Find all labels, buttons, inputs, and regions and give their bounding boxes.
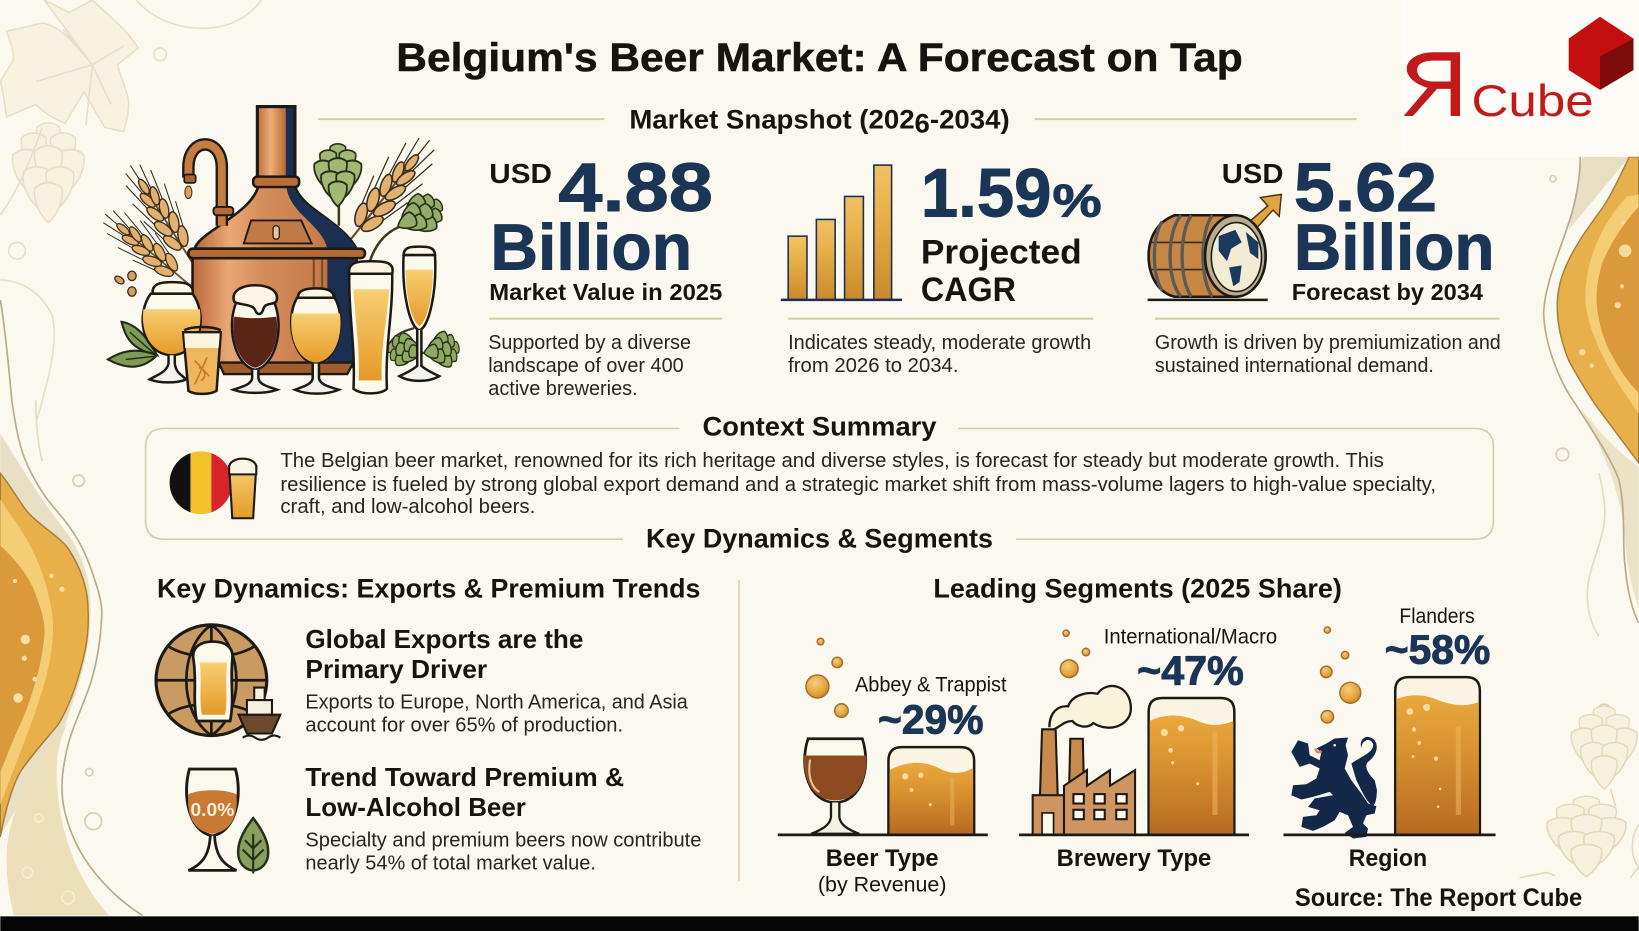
black footer bar	[0, 916, 1639, 931]
icon: Flemish lion	[1291, 737, 1377, 839]
kettle	[184, 107, 365, 374]
panel: leading segments	[778, 573, 1496, 896]
stat card: market value: USD	[489, 157, 552, 189]
icon: barrel with globe and arrow	[1148, 194, 1281, 300]
panel: leading segments: Leading Segments (2025 Share)	[933, 573, 1342, 604]
bar: 29 percent	[888, 747, 974, 834]
segment: beer type: ~29%	[878, 697, 984, 743]
stat card: CAGR: Indicates steady, moderate growth	[788, 332, 1091, 354]
segment: beer type: (by Revenue)	[818, 873, 946, 896]
wheat and hops behind kettle	[94, 127, 451, 316]
heading: market snapshot: Market Snapshot (202	[629, 104, 910, 135]
panel: key dynamics: Global Exports are the	[305, 624, 583, 654]
stat card: forecast: Forecast by 2034	[1292, 279, 1483, 305]
panel: key dynamics: Trend Toward Premium &	[305, 762, 624, 792]
beer wave left	[0, 300, 142, 915]
leaves at base left	[108, 322, 157, 367]
stat card: forecast: sustained international demand.	[1155, 355, 1434, 377]
stat card: market value: Supported by a diverse	[488, 332, 691, 354]
stat card: forecast: Billion	[1294, 211, 1495, 284]
icon: factory with smoke	[1033, 686, 1135, 835]
faint hop decoration top left	[0, 0, 262, 420]
stat card: market value: Market Value in 2025	[489, 279, 723, 305]
segment: beer type: Beer Type	[826, 845, 939, 872]
segment: region: ~58%	[1385, 627, 1490, 673]
stat card: market value	[488, 149, 723, 400]
panel: key dynamics: Low-Alcohol Beer	[305, 792, 526, 822]
panel: key dynamics: Primary Driver	[305, 654, 487, 684]
icon: growth bars	[781, 165, 902, 300]
icon: globe with beer and ship	[156, 625, 280, 740]
stat card: forecast: 5.62	[1294, 149, 1437, 226]
stat card: CAGR: %	[1053, 174, 1102, 226]
summary text: craft, and low-alcohol beers.	[280, 496, 535, 518]
summary text	[280, 450, 1436, 518]
bar: 47 percent	[1149, 698, 1234, 834]
segment: brewery type: ~47%	[1137, 647, 1244, 693]
stat card: market value: Billion	[490, 211, 692, 284]
panel: key dynamics: nearly 54% of total market value.	[305, 852, 596, 874]
heading: market snapshot: -2034)	[930, 104, 1010, 135]
segment: brewery type: International/Macro	[1104, 626, 1277, 649]
icon: belgian flag and beer	[170, 451, 256, 518]
panel: context summary: Context Summary	[702, 411, 937, 442]
segment: beer type: Abbey & Trappist	[855, 674, 1007, 697]
panel: key dynamics	[156, 573, 701, 874]
panel: key dynamics: Specialty and premium beers now contribute	[305, 829, 701, 851]
panel: key dynamics: Exports to Europe, North America, and Asia	[305, 691, 688, 713]
stat card: market value: 4.88	[558, 149, 713, 226]
stat card: CAGR: 1.59	[921, 154, 1051, 231]
bar: 58 percent	[1395, 677, 1480, 834]
panel: context summary	[146, 411, 1493, 539]
segment: brewery type: Brewery Type	[1057, 845, 1211, 872]
faint hops bottom right	[1520, 706, 1639, 878]
bubbles	[1321, 627, 1361, 723]
stat card: CAGR: CAGR	[921, 271, 1016, 309]
stat card: CAGR: from 2026 to 2034.	[788, 355, 958, 377]
tulip pale glass	[291, 288, 341, 394]
tall pilsner glass	[349, 261, 393, 393]
logo: RCube	[1404, 17, 1633, 126]
small beer glass	[183, 327, 221, 394]
source credit: Source: The Report Cube	[1295, 884, 1582, 912]
stat card: CAGR: Projected	[921, 233, 1082, 271]
stat card: CAGR	[781, 154, 1102, 377]
segment: region: Region	[1349, 845, 1427, 872]
logo: RCube: Cube	[1472, 75, 1594, 126]
logo backdrop	[1400, 0, 1639, 157]
icon: low-alcohol glass and leaf: 0.0%	[190, 799, 235, 820]
summary text: The Belgian beer market, renowned for its rich heritage and diverse styles, is forecast for steady but moderate growth. This	[280, 450, 1384, 472]
icon: low-alcohol glass and leaf	[187, 769, 268, 874]
stat card: forecast: USD	[1222, 157, 1283, 189]
panel: key dynamics: Key Dynamics: Exports & Premium Trends	[157, 573, 700, 604]
grains	[113, 271, 136, 296]
segment: brewery type	[1019, 626, 1277, 872]
summary text: resilience is fueled by strong global export demand and a strategic market shift from mass-volume lagers to high-value specialty,	[280, 474, 1436, 496]
dark tulip glass	[232, 285, 279, 393]
section rule: snapshot	[318, 118, 1357, 120]
beer wave right	[1544, 157, 1639, 717]
heading: key dynamics and segments: Key Dynamics & Segments	[646, 523, 993, 554]
segment: beer type	[778, 638, 1007, 896]
stat card: forecast	[1148, 149, 1501, 377]
panel divider	[738, 580, 740, 881]
icon: goblet of dark ale	[804, 739, 867, 834]
goblet of pale ale	[143, 282, 201, 382]
stat card: forecast: Growth is driven by premiumization and	[1155, 332, 1501, 354]
bubbles	[806, 638, 848, 717]
stat card: market value: landscape of over 400	[488, 355, 684, 377]
stat card: market value: active breweries.	[488, 378, 638, 400]
segment: region: Flanders	[1399, 605, 1475, 628]
hops at base right	[385, 328, 462, 371]
flute	[399, 247, 439, 381]
panel: key dynamics: account for over 65% of production.	[305, 714, 623, 736]
illustration: copper kettle with beers, hops and wheat	[94, 107, 462, 394]
title: Belgium's Beer Market: A Forecast on Tap	[396, 36, 1243, 80]
segment: region	[1283, 605, 1496, 872]
heading: market snapshot: 6	[915, 108, 930, 139]
bubbles	[1060, 630, 1090, 678]
